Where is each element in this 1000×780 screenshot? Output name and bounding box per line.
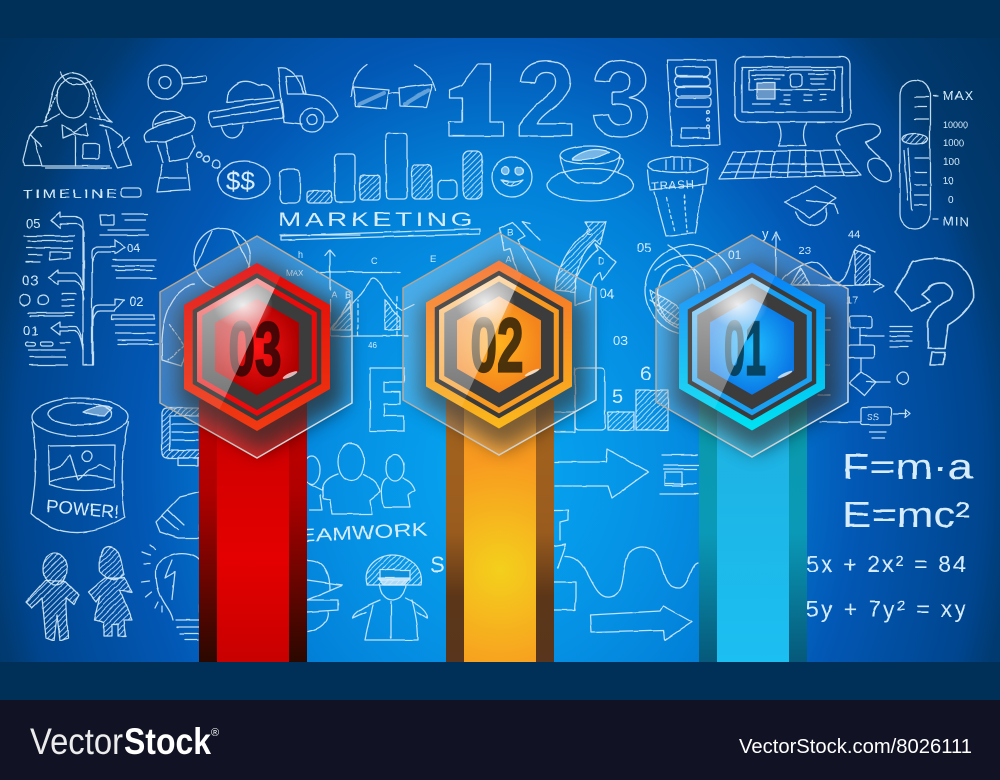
highlight [777,370,793,379]
numeral 1 [449,64,503,136]
sketch chart between ribbons [280,235,414,336]
timeline numbers [22,216,143,338]
axis labels: 23 [799,245,811,257]
axis labels [728,226,860,307]
formulas: 5x + 2x² = 84 [806,551,966,577]
thermometer labels: 1000 [943,138,964,149]
icon: pilot with goggles [353,555,427,640]
highlight [524,368,540,377]
ribbon: blue 01 [699,400,807,662]
small stack beside ribbon [554,510,576,610]
chart labels: B [345,290,351,300]
number: 02 [470,304,524,388]
thermometer labels [943,88,974,229]
flowchart [818,316,912,438]
highlight [282,370,298,380]
outer gloss tint [426,260,522,407]
icon: frying pan [148,65,207,99]
axis labels: 01 [728,248,742,262]
timeline numbers: 03 [22,272,40,288]
donut chart [645,245,735,335]
timeline diagram [20,212,158,365]
footer logo [30,721,219,762]
outer gloss tint [184,263,280,410]
thermometer labels: 0 [948,195,954,206]
chart labels [286,250,436,350]
glass hexagon [656,235,848,457]
ribbon: orange 02 [446,400,554,662]
shadow [178,260,344,452]
numeral 3: 3 [591,38,651,159]
numeral 2: 2 [516,38,576,159]
axis labels: 17 [846,295,858,307]
axis labels: 44 [848,229,860,241]
big sketch arrow [555,449,648,498]
top band [0,0,1000,38]
outline arrow [590,606,692,640]
arrow labels [506,227,651,408]
footer url: VectorStock.com/8026111 [739,736,972,758]
icon: hat figure by left ribbon [307,560,342,632]
chart labels: E [430,254,436,264]
icon: computer tower [667,60,720,146]
timeline numbers: 02 [129,294,143,309]
step bars [520,368,668,432]
big numerals 1 2 3 [449,38,651,159]
dollar signs: $$ [226,166,255,196]
icon: man in hat with money thought [144,111,270,199]
icon: coffee cup [547,146,633,201]
teamwork heading: TEAMWORK [284,520,428,548]
badge 03 [160,236,352,458]
trash label: TRASH [652,179,695,193]
document lines [660,455,698,494]
arrow labels: B [507,227,513,237]
badge 02 [403,233,596,455]
icon: wire curve [565,547,698,597]
icon: boy [26,553,79,641]
bottom band [0,662,1000,700]
bar chart sketch [280,133,482,203]
timeline text: TIMELINE [23,187,119,201]
chart labels: h [298,250,303,260]
icon: light bulb [142,545,200,640]
icon: glasses [351,65,435,109]
icon: team people [304,443,415,514]
axis labels: y [762,226,769,241]
footer logo: Vector [30,721,123,762]
icon: woman [23,72,131,168]
shadow [420,258,586,450]
marketing underline [281,229,480,240]
ribbon: red 03 [199,400,307,662]
icon: person behind glass [162,228,250,366]
footer bar [0,700,1000,780]
arrow labels: 05 [637,240,651,255]
icon: eraser [156,492,200,538]
hexagon emblem [184,263,330,431]
timeline heading [23,187,141,201]
curved arrows A B C D [500,222,616,305]
arrow labels: 6 [640,363,651,385]
footer logo: Stock [124,721,211,762]
arrow labels: A [506,254,512,264]
thermometer labels: MIN [943,214,970,229]
arrow labels: 03 [613,333,627,348]
marketing heading: MARKETING [278,210,476,231]
icon: power can [31,398,128,533]
formulas [806,446,974,622]
gloss [439,276,517,395]
icon: desktop computer [719,57,896,186]
icon: smiley [492,157,532,197]
power label: POWER! [46,496,120,522]
arrow labels: C [586,227,593,237]
timeline numbers: 01 [23,323,39,338]
chart labels: C [371,256,378,266]
thermometer labels: 100 [943,157,960,168]
icon: girl [88,547,132,636]
chart labels: 46 [368,341,377,350]
hexagon emblem: 01 [724,306,766,392]
hexagon emblem [426,260,572,428]
arrow labels: D [598,256,605,266]
hexagon emblem [679,262,825,430]
icon: thermometer scale [900,80,938,229]
arrow labels: 5 [612,386,623,408]
thermometer labels: 10000 [943,120,968,130]
glass hexagon [403,233,596,455]
outer gloss tint [679,262,775,409]
flowchart label: SS [867,412,879,422]
thermometer labels: MAX [943,88,974,103]
number: 03 [228,307,282,392]
timeline end box [121,188,141,197]
timeline numbers: 05 [26,216,40,231]
gloss [692,278,770,397]
chart labels: A [331,290,337,300]
timeline numbers: 04 [127,241,141,255]
letter E block [370,368,404,431]
chart labels: MAX [286,269,304,278]
formulas: F=m·a [842,446,974,487]
shadow [673,260,839,452]
gloss [197,278,275,398]
icon: trash can [648,157,708,236]
axis chart right [772,232,884,300]
badge 01 [656,235,848,457]
letter S fragment: S [430,552,445,577]
formulas: E=mc² [842,494,970,535]
footer logo: ® [211,727,219,739]
icon: question mark [895,258,973,365]
sketch doodles layer [20,38,974,641]
blue background panel [0,38,1000,662]
icon: truck [208,68,338,138]
icon: graduation cap [785,186,838,226]
thermometer labels: 10 [943,176,955,187]
icon: laptop behind glass [162,408,202,466]
glass hexagon [160,236,352,458]
formulas: 5y + 7y² = xy [806,596,966,622]
arrow labels: 04 [600,286,614,301]
